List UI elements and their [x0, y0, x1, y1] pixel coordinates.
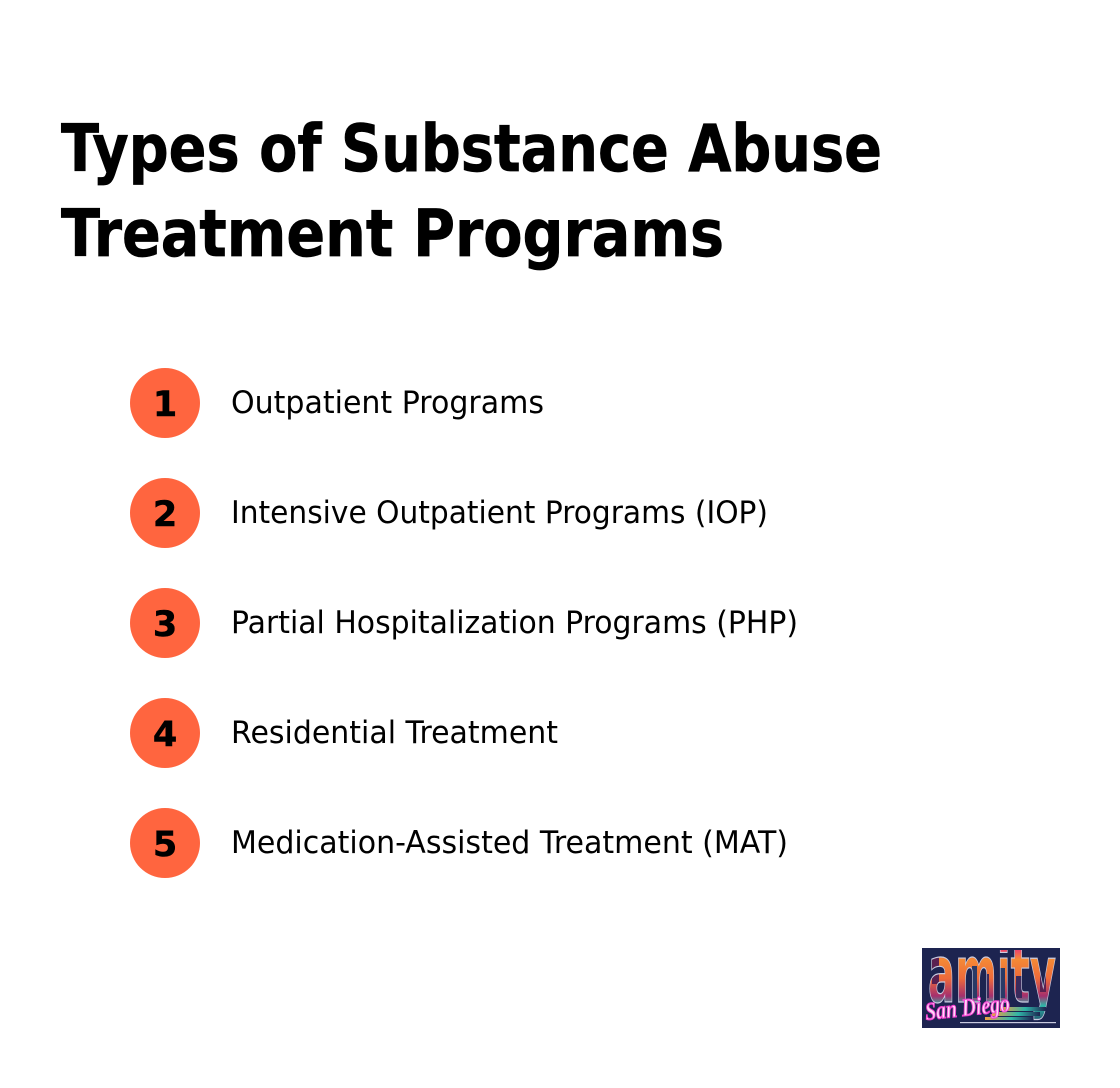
title: Treatment Programs: [61, 197, 724, 272]
list item 2: [130, 478, 768, 548]
label: intensive outpatient programs: Intensive Outpatient Programs (IOP): [231, 495, 768, 531]
number badge 4: 4: [153, 715, 177, 755]
logo beach stripes: [960, 1007, 1056, 1023]
list item 4: [130, 698, 558, 768]
number badge 4: [130, 698, 200, 768]
title: Types of Substance Abuse: [61, 112, 882, 187]
number badge 5: [130, 808, 200, 878]
number badge 2: [130, 478, 200, 548]
logo script: San Diego: [924, 990, 1011, 1026]
logo: Amity San Diego: [922, 948, 1060, 1028]
number badge 5: 5: [153, 825, 177, 865]
label: residential treatment: Residential Treatment: [231, 715, 558, 751]
number badge 3: [130, 588, 200, 658]
list item 5: [130, 808, 788, 878]
list item 3: [130, 588, 798, 658]
label: medication-assisted treatment: Medication-Assisted Treatment (MAT): [231, 825, 788, 861]
label: partial hospitalization programs: Partial Hospitalization Programs (PHP): [231, 605, 798, 641]
list item 1: [130, 368, 544, 438]
number badge 1: [130, 368, 200, 438]
number badge 2: 2: [153, 495, 177, 535]
title: [61, 112, 882, 272]
number badge 1: 1: [153, 385, 177, 425]
number badge 3: 3: [153, 605, 177, 645]
label: outpatient programs: Outpatient Programs: [231, 385, 544, 421]
